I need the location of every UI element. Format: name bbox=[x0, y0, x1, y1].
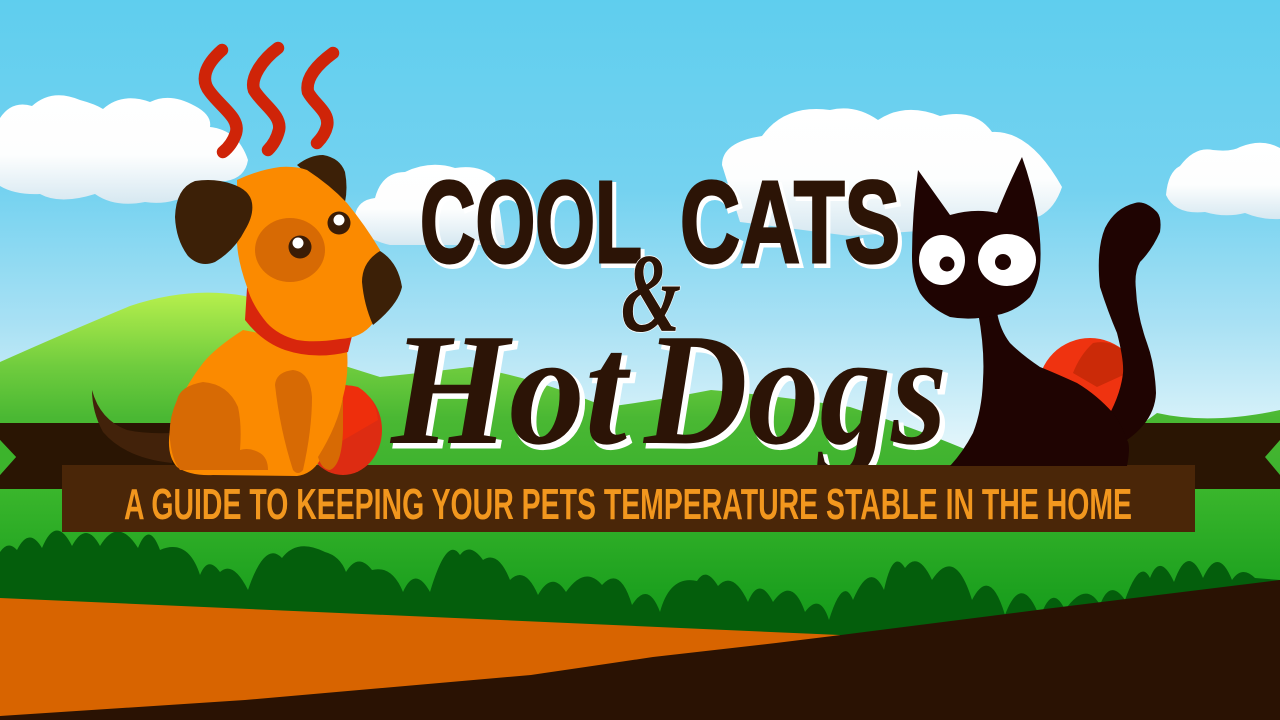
yarn ball by cat bbox=[1038, 338, 1142, 442]
dog back ear bbox=[297, 155, 346, 202]
title: Cool Cats: COOL bbox=[423, 160, 645, 290]
heat waves icon bbox=[205, 48, 333, 152]
dog collar bbox=[245, 288, 352, 356]
cloud: right bbox=[1166, 143, 1280, 219]
ribbon tails bbox=[0, 423, 1280, 489]
cloud: centre right bbox=[722, 108, 1062, 236]
cat eyes bbox=[919, 234, 1036, 286]
dog tail bbox=[92, 390, 172, 463]
dog right ear bbox=[362, 251, 402, 325]
dog front legs bbox=[275, 370, 343, 473]
title: Cool Cats: CATS bbox=[683, 160, 903, 290]
bushes bbox=[0, 530, 1280, 700]
cat illustration bbox=[912, 157, 1161, 466]
dog eyes bbox=[288, 212, 350, 258]
dog eye patch bbox=[255, 218, 325, 282]
title: Cool Cats: CATS bbox=[680, 157, 900, 287]
sky background bbox=[0, 0, 1280, 450]
title: Hot Dogs: Dogs bbox=[642, 300, 947, 478]
dog body bbox=[169, 330, 348, 476]
subtitle banner bbox=[62, 465, 1195, 532]
title: Cool Cats bbox=[420, 157, 903, 290]
grass field bbox=[0, 489, 1280, 649]
orange path bbox=[0, 598, 840, 720]
dog haunch bbox=[170, 382, 268, 470]
ribbon: right tail bbox=[1080, 423, 1280, 489]
ribbon: left tail bbox=[0, 423, 200, 489]
dark road bbox=[0, 580, 1280, 720]
title: Hot Dogs: Hot bbox=[393, 304, 635, 482]
cloud: centre left bbox=[355, 165, 505, 245]
title: Hot Dogs bbox=[389, 300, 951, 482]
title: Cool Cats: COOL bbox=[420, 157, 642, 287]
title: ampersand: & bbox=[621, 232, 681, 356]
cloud: left bbox=[0, 95, 248, 204]
cat body bbox=[950, 312, 1129, 466]
title bbox=[389, 157, 951, 482]
title: Hot Dogs: Dogs bbox=[646, 304, 951, 482]
dog left ear bbox=[175, 180, 252, 264]
title: Hot Dogs: Hot bbox=[389, 300, 631, 478]
dog head bbox=[237, 167, 380, 341]
ribbon: left notch bbox=[0, 440, 16, 475]
cat tail bbox=[1099, 202, 1161, 440]
dog illustration bbox=[92, 155, 402, 476]
red yarn ball by dog bbox=[304, 385, 382, 475]
hills bbox=[0, 293, 1280, 520]
cat head and ears bbox=[912, 157, 1041, 319]
